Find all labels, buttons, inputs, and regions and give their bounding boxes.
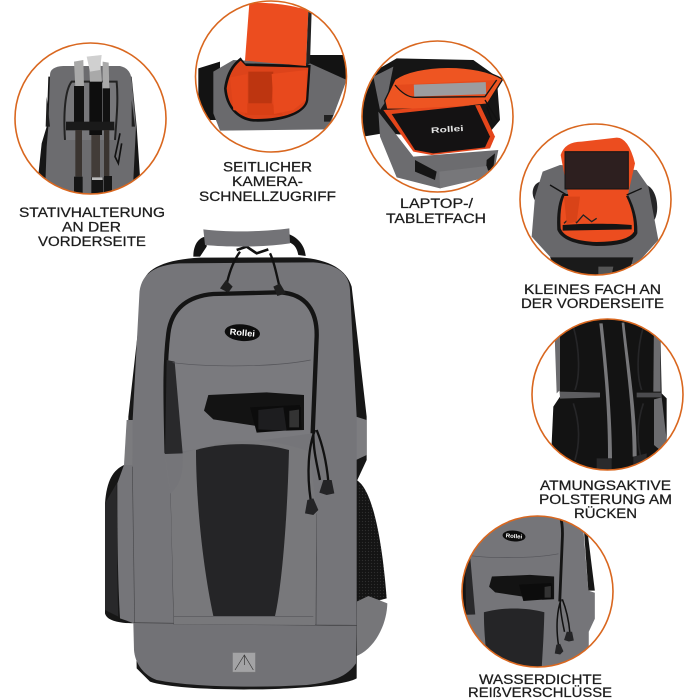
label: waterproof zippers: REIßVERSCHLÜSSE (468, 685, 612, 700)
backpack logo badge: Rollei (229, 327, 255, 339)
photo: padded back (552, 317, 667, 470)
label: tripod holder (19, 205, 165, 249)
ring (520, 124, 671, 275)
label: small front pocket: KLEINES FACH AN (524, 282, 661, 297)
label: laptop compartment: TABLETFACH (386, 211, 486, 226)
label: side camera access: KAMERA- (232, 174, 303, 189)
backpack handle (203, 228, 290, 247)
ring (15, 43, 166, 194)
label: laptop compartment (386, 196, 486, 226)
photo: open camera compartment (198, 3, 347, 131)
callout: breathable back padding (532, 317, 683, 521)
backpack logo badge (224, 323, 261, 343)
photo: tripod on bag (38, 55, 140, 193)
label: waterproof zippers (468, 672, 612, 700)
label: side camera access: SCHNELLZUGRIFF (199, 189, 336, 204)
label: tripod holder: VORDERSEITE (38, 234, 146, 249)
photo: open laptop compartment: Rollei (431, 124, 464, 135)
photo: zipper close-up: Rollei (505, 533, 523, 541)
callout: side camera access (196, 1, 347, 204)
label: waterproof zippers: WASSERDICHTE (479, 672, 602, 687)
callout: tripod holder (15, 43, 166, 249)
label: laptop compartment: LAPTOP-/ (400, 196, 473, 211)
photo: open front pocket (532, 138, 658, 277)
ring (532, 319, 683, 470)
callout: laptop compartment (360, 41, 513, 226)
ring (462, 516, 613, 667)
photo: open laptop compartment (360, 58, 503, 188)
callout: waterproof zippers (462, 516, 613, 700)
ring (362, 41, 513, 192)
photo: zipper close-up (463, 516, 595, 667)
ring (196, 1, 346, 152)
label: breathable back padding: POLSTERUNG AM (539, 492, 672, 507)
label: small front pocket (521, 282, 664, 311)
label: breathable back padding: RÜCKEN (574, 506, 637, 521)
label: tripod holder: STATIVHALTERUNG (19, 205, 165, 220)
label: side camera access: SEITLICHER (223, 160, 312, 174)
label: side camera access (199, 160, 336, 204)
label: breathable back padding: ATMUNGSAKTIVE (540, 478, 671, 493)
label: breathable back padding (539, 478, 672, 521)
label: tripod holder: AN DER (62, 220, 121, 234)
callout: small front pocket (520, 124, 671, 311)
label: small front pocket: DER VORDERSEITE (521, 296, 664, 311)
main backpack photo (105, 228, 387, 689)
